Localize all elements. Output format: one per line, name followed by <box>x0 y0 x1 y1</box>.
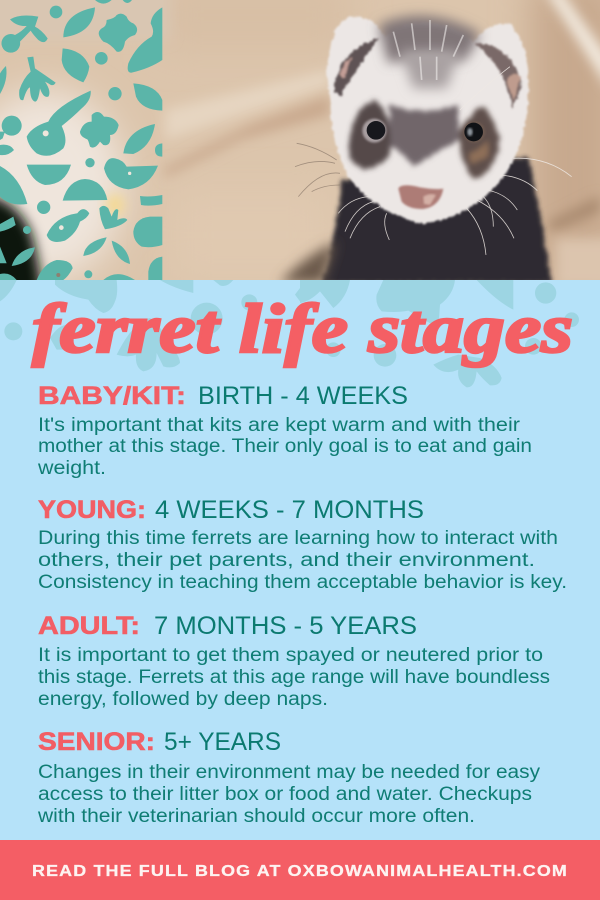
flower <box>99 14 137 52</box>
text: baby/kit body <box>37 415 532 479</box>
ferret head <box>327 17 528 224</box>
heading: adult: ADULT: <box>38 612 140 640</box>
heading: adult <box>38 612 417 640</box>
footer banner <box>0 840 600 900</box>
section: adult <box>38 612 550 710</box>
text: adult body: this stage. Ferrets at this age range will have boundless <box>38 667 550 688</box>
heading: young: 4 WEEKS - 7 MONTHS <box>155 496 424 524</box>
footer text: READ THE FULL BLOG AT OXBOWANIMALHEALTH.COM <box>32 863 568 880</box>
fish shape <box>47 209 89 242</box>
title: ferret life stages <box>32 291 573 368</box>
second flower <box>80 112 119 148</box>
section: young <box>38 496 567 593</box>
heading: young <box>38 496 424 524</box>
text: senior body: access to their litter box or food and water. Checkups <box>38 784 532 805</box>
text: adult body: It is important to get them spayed or neutered prior to <box>38 645 543 666</box>
text: baby/kit body: It's important that kits are kept warm and with their <box>38 415 521 436</box>
heading: senior: SENIOR: <box>38 728 155 756</box>
faded paw pattern, left <box>0 280 300 371</box>
heading: baby/kit: BABY/KIT: <box>38 382 186 410</box>
bird <box>104 158 158 189</box>
text: young body: Consistency in teaching them acceptable behavior is key. <box>38 572 567 593</box>
photo: ferret on a wooden background <box>0 0 600 300</box>
hand leaf <box>19 57 56 102</box>
ferret eyes <box>362 119 485 143</box>
section: senior <box>37 728 541 827</box>
heading: senior: 5+ YEARS <box>164 728 281 756</box>
ferret fur streaks <box>393 20 463 80</box>
ferret crown <box>378 16 480 63</box>
text: adult body <box>38 645 550 710</box>
ferret whiskers <box>295 67 572 255</box>
teal pattern overlay <box>0 0 162 280</box>
tulip <box>99 206 127 229</box>
text: senior body: Changes in their environment may be needed for easy <box>38 762 541 783</box>
text: adult body: energy, followed by deep naps. <box>38 689 328 710</box>
top edge shapes <box>95 0 112 4</box>
text: young body: others, their pet parents, and their environment. <box>38 550 535 571</box>
text: baby/kit body: mother at this stage. Their only goal is to eat and gain <box>38 436 532 457</box>
text: young body: During this time ferrets are learning how to interact with <box>38 528 558 549</box>
heading: baby/kit <box>38 382 408 410</box>
rabbit shape <box>27 91 91 156</box>
photo background: blurred wood <box>0 0 600 300</box>
section: baby/kit <box>37 382 532 479</box>
heading: young: YOUNG: <box>38 496 146 524</box>
panel: blue content area <box>0 280 600 840</box>
heading: adult: 7 MONTHS - 5 YEARS <box>154 612 417 640</box>
text: young body <box>38 528 567 593</box>
ferret nose <box>398 185 443 209</box>
text: senior body <box>37 762 541 827</box>
text: senior body: with their veterinarian should occur more often. <box>37 806 475 827</box>
heading: baby/kit: BIRTH - 4 WEEKS <box>198 382 408 410</box>
text: baby/kit body: weight. <box>37 458 106 479</box>
ferret body <box>322 157 552 283</box>
faded paw pattern, right <box>300 280 579 387</box>
half circles <box>27 165 71 185</box>
cherry shape <box>1 15 48 53</box>
heading: senior <box>38 728 281 756</box>
ferret <box>280 16 572 283</box>
ferret ears <box>333 38 522 108</box>
ferret eye mask <box>349 99 499 178</box>
